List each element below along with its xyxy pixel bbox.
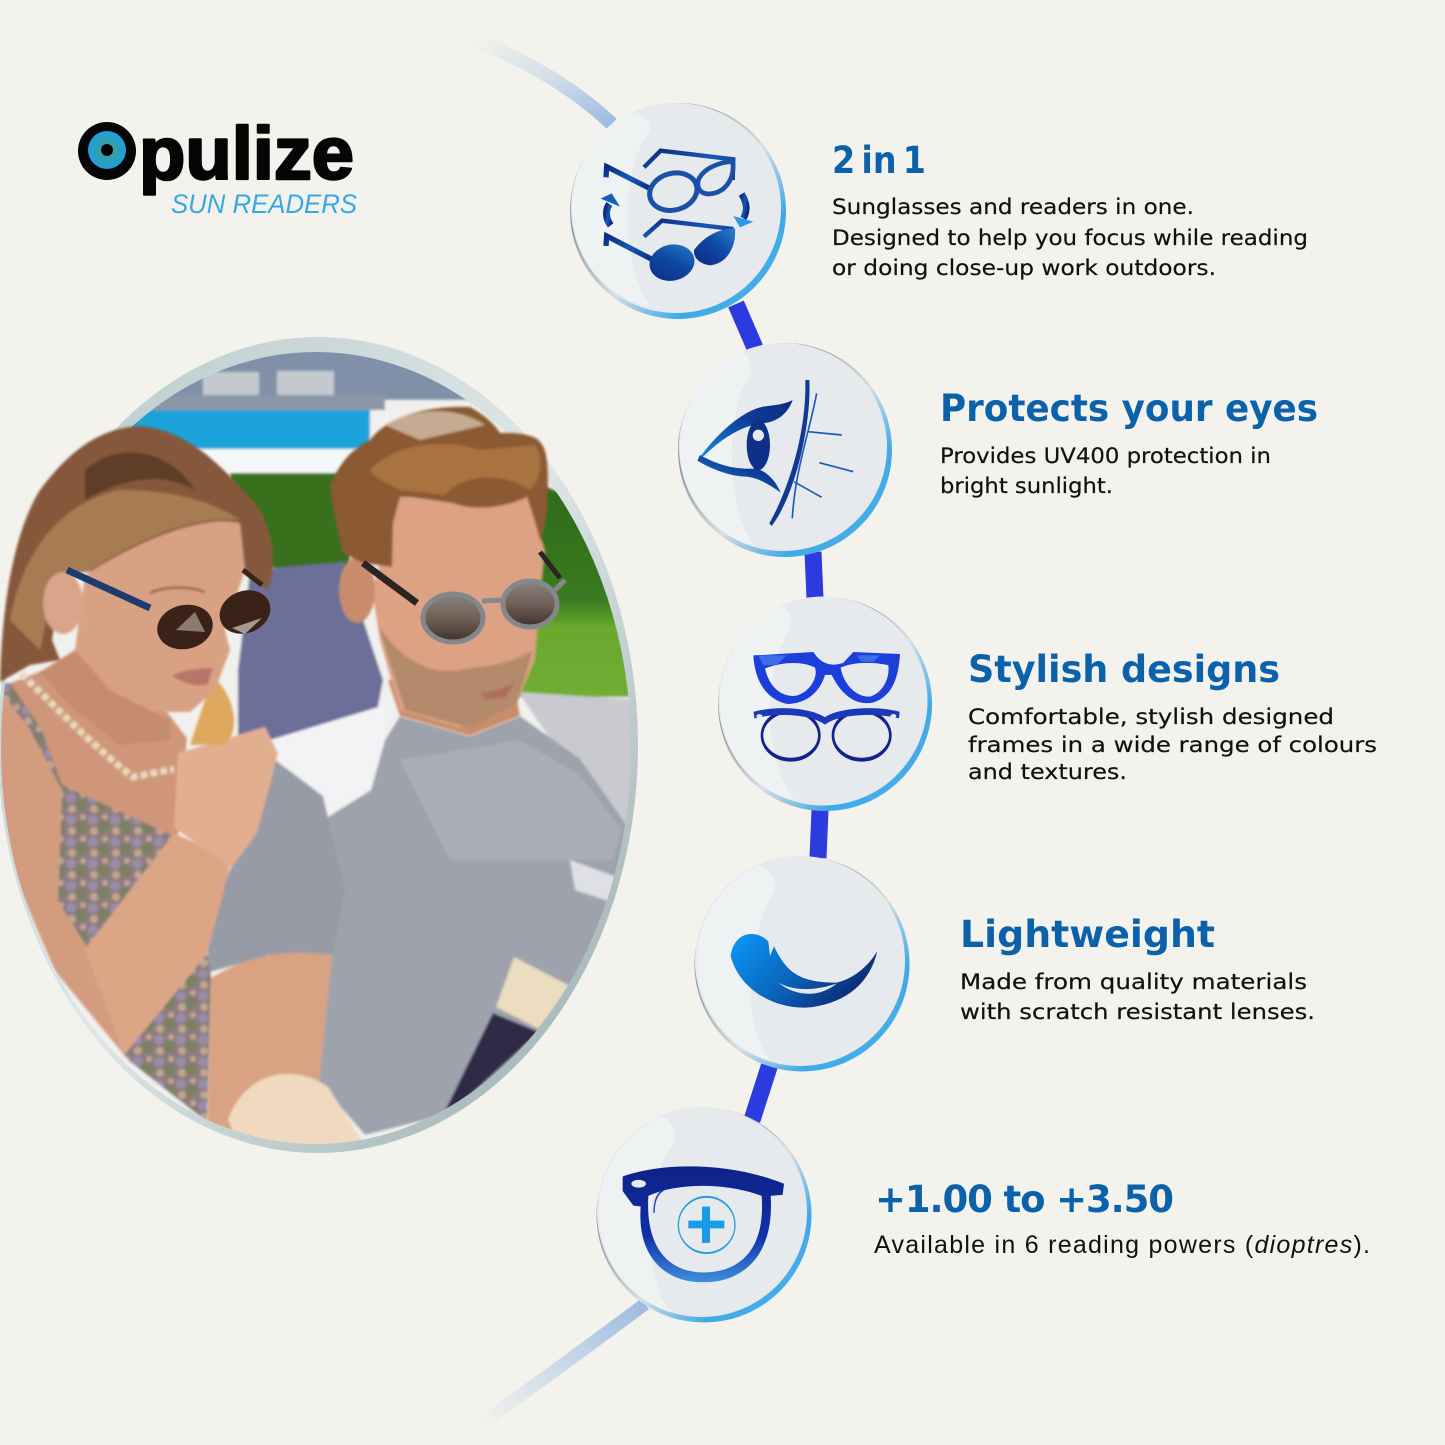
description: frames in a wide range of colours (968, 733, 1377, 758)
woman's forearm (85, 833, 232, 1055)
arc: bottom connector (480, 1304, 645, 1425)
description: bright sunlight. (940, 474, 1113, 499)
icon: reversible glasses and sunglasses (601, 151, 753, 285)
description (832, 195, 1308, 281)
description: Made from quality materials (960, 970, 1307, 995)
feature: Stylish designs (968, 648, 1377, 785)
heading: 2 in 1 (832, 139, 926, 182)
feature: 2 in 1 (832, 139, 1308, 281)
dress (0, 683, 211, 1122)
heading: Stylish designs (968, 648, 1280, 691)
lens 5 (596, 1107, 812, 1322)
description: Available in 6 reading powers (dioptres). (874, 1231, 1370, 1259)
woman's sunglasses (67, 570, 277, 654)
man's sunglasses (363, 552, 565, 642)
logo subtitle: SUN READERS (171, 189, 357, 219)
woman's head (0, 426, 273, 777)
logo eye (78, 122, 136, 180)
description (940, 444, 1271, 499)
photo ring (0, 337, 638, 1153)
shirt (319, 716, 632, 1135)
icon: reading power lens (623, 1166, 784, 1282)
man's arm (206, 951, 334, 1130)
description: Comfortable, stylish designed (968, 705, 1334, 730)
lens 1 (570, 103, 786, 319)
description: Provides UV400 protection in (940, 444, 1271, 469)
arc: top connector (470, 38, 612, 124)
lens 2 (678, 343, 892, 557)
feature: Protects your eyes (940, 387, 1318, 499)
sleeve (207, 759, 345, 973)
woman's chest (5, 671, 187, 838)
heading: Protects your eyes (940, 387, 1318, 430)
description: Sunglasses and readers in one. (832, 195, 1194, 220)
photo scene (0, 340, 650, 1160)
icon: eye with UV shield (697, 380, 853, 526)
feature: reading powers (874, 1178, 1370, 1259)
description (960, 970, 1315, 1025)
logo wordmark: pulize (139, 112, 354, 195)
woman's left arm and shoulder (0, 685, 128, 1060)
description: or doing close-up work outdoors. (832, 256, 1216, 281)
description: and textures. (968, 760, 1127, 785)
man's head (330, 407, 548, 736)
icon: feather (731, 934, 877, 1008)
description: with scratch resistant lenses. (960, 1000, 1315, 1025)
cushion (238, 562, 383, 745)
heading: Lightweight (960, 913, 1215, 956)
shoulder highlight (270, 706, 380, 747)
photo: couple reading in sunglasses (0, 337, 650, 1160)
feature: Lightweight (960, 913, 1315, 1025)
connector links (736, 304, 820, 1120)
lens 3 (718, 596, 932, 811)
logo (78, 112, 357, 219)
icon: two stylish frames (753, 652, 900, 760)
necklace (21, 674, 174, 777)
description (968, 705, 1377, 785)
heading: +1.00 to +3.50 (875, 1178, 1174, 1221)
description: Designed to help you focus while reading (832, 226, 1308, 251)
book (496, 957, 570, 1029)
hand (174, 727, 278, 867)
lens 4 (694, 856, 910, 1072)
